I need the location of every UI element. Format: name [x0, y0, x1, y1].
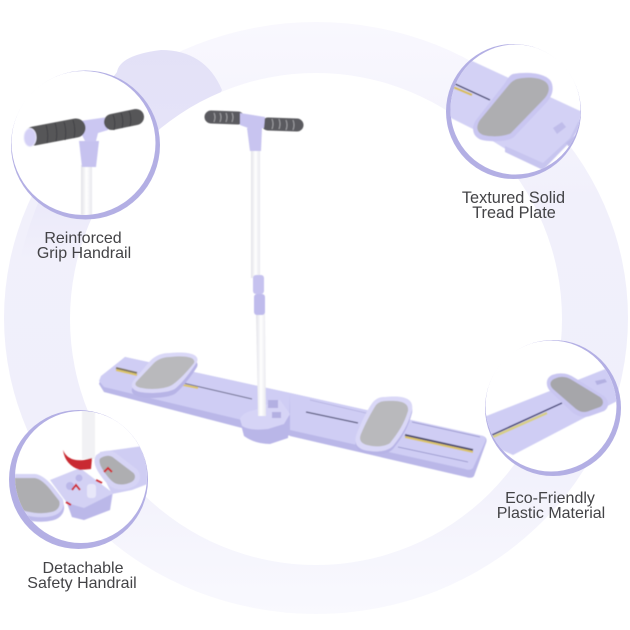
callout: eco-friendly plastic material: Plastic Material — [497, 505, 605, 522]
callout: detachable safety handrail — [9, 408, 150, 592]
T handle grips — [211, 113, 297, 130]
handrail socket — [240, 400, 290, 444]
callout: detachable safety handrail: Safety Handrail — [27, 575, 137, 592]
handrail pole — [247, 128, 266, 416]
label: textured solid tread plate: Textured Solid — [462, 189, 565, 207]
icon: track close-up — [486, 369, 616, 456]
callout: eco-friendly plastic material — [484, 340, 625, 522]
label: eco-friendly plastic material: Eco-Friendly — [505, 490, 595, 507]
left tread plate — [132, 352, 198, 398]
callout: reinforced grip handrail: Grip Handrail — [37, 245, 131, 262]
label: detachable safety handrail: Detachable — [43, 560, 124, 577]
callout: textured solid tread plate: Tread Plate — [472, 204, 556, 222]
base board — [99, 357, 487, 478]
icon: handrail close-up — [24, 111, 136, 220]
product: balance stepper with handrail — [99, 113, 487, 478]
callout: reinforced grip handrail — [11, 70, 160, 262]
callout: textured solid tread plate — [446, 44, 581, 218]
right tread plate — [355, 397, 412, 454]
label: reinforced grip handrail: Reinforced — [44, 230, 122, 247]
icon: detachable socket with arrows — [12, 408, 150, 520]
icon: tread plate close-up — [450, 61, 580, 170]
